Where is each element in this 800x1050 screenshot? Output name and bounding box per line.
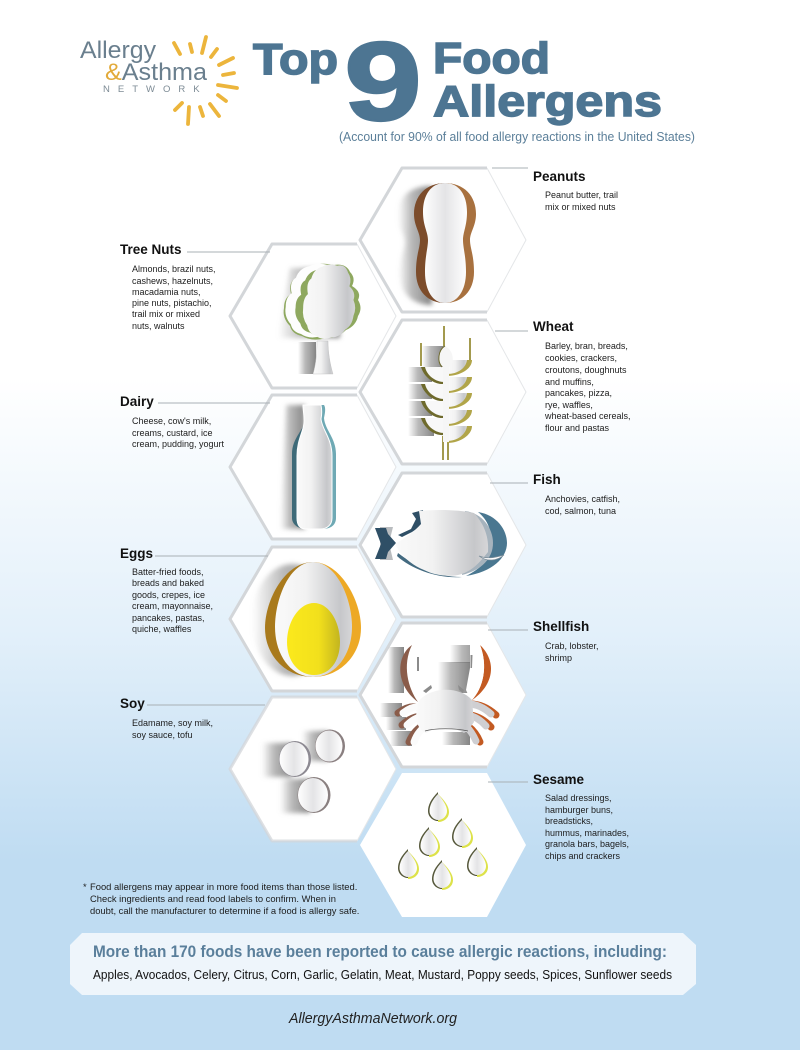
icon: sun rays bbox=[174, 37, 237, 124]
icon: peanut bbox=[398, 183, 476, 305]
label: Sesame: Salad dressings, bbox=[545, 793, 612, 803]
icon: wheat bbox=[408, 326, 472, 460]
egg orange shell edge bbox=[313, 562, 361, 677]
label: Wheat: and muffins, bbox=[545, 377, 594, 387]
label: Dairy bbox=[120, 394, 270, 449]
hexagon: wheat bbox=[360, 320, 526, 464]
label: Sesame: Sesame bbox=[533, 772, 585, 787]
hexagon: soy bbox=[230, 697, 396, 841]
bottle dark teal edge bbox=[292, 420, 315, 529]
crab claw white inner strip bbox=[466, 645, 484, 701]
wheat right grains bbox=[447, 360, 472, 443]
label: Wheat: cookies, crackers, bbox=[545, 353, 617, 363]
egg white bbox=[275, 562, 352, 677]
label: Eggs: goods, crepes, ice bbox=[132, 590, 205, 600]
website url: AllergyAsthmaNetwork.org bbox=[288, 1011, 457, 1027]
label: Soy: Soy bbox=[120, 696, 145, 711]
bean 2 bbox=[315, 730, 345, 762]
label: Dairy: creams, custard, ice bbox=[132, 428, 213, 438]
fish gill slit bbox=[479, 555, 504, 560]
label: Tree Nuts: nuts, walnuts bbox=[132, 321, 185, 331]
label: Wheat: wheat-based cereals, bbox=[544, 411, 631, 421]
logo wordmark: &Asthma bbox=[105, 59, 208, 86]
crab right claw edge bbox=[471, 645, 491, 701]
label: Tree Nuts bbox=[120, 242, 270, 331]
fish blue tail crescent bbox=[466, 512, 507, 576]
crab left claw edge bbox=[400, 645, 418, 702]
label: Shellfish bbox=[488, 619, 599, 663]
label: Dairy: Cheese, cow's milk, bbox=[132, 416, 211, 426]
title: Top 9 Food Allergens: Allergens bbox=[433, 77, 662, 126]
label: Wheat: flour and pastas bbox=[545, 423, 610, 433]
label: Soy bbox=[120, 696, 265, 740]
crab shadows bbox=[380, 645, 480, 746]
hexagon: eggs bbox=[230, 547, 396, 691]
crab notches bbox=[417, 655, 472, 693]
tree trunk bbox=[313, 341, 333, 374]
label: Wheat bbox=[495, 319, 631, 433]
label: Eggs bbox=[120, 546, 268, 634]
footnote: Food allergens may appear in more food items than those listed. bbox=[90, 881, 357, 892]
label: Sesame: chips and crackers bbox=[545, 851, 621, 861]
fish tail bbox=[380, 527, 393, 560]
soybean shadows bbox=[262, 731, 328, 813]
logo wordmark: Allergy bbox=[80, 37, 156, 64]
label: Eggs: breads and baked bbox=[132, 578, 204, 588]
label: Peanuts: Peanuts bbox=[533, 169, 586, 184]
hexagon: dairy bbox=[230, 395, 396, 539]
label: Soy: soy sauce, tofu bbox=[132, 730, 193, 740]
label: Eggs: Eggs bbox=[120, 546, 153, 561]
label: Sesame bbox=[488, 772, 629, 861]
bottle light teal edge bbox=[315, 405, 336, 529]
icon: tree bbox=[278, 264, 360, 374]
egg yolk bbox=[287, 603, 340, 675]
label: Eggs: Batter-fried foods, bbox=[132, 567, 204, 577]
label: Tree Nuts: Almonds, brazil nuts, bbox=[132, 264, 216, 274]
subtitle: (Account for 90% of all food allergy reactions in the United States) bbox=[339, 130, 695, 144]
title: Top 9 Food Allergens bbox=[253, 19, 662, 144]
label: Tree Nuts: pine nuts, pistachio, bbox=[132, 298, 212, 308]
seed 5 bbox=[432, 860, 453, 890]
label: Wheat: pancakes, pizza, bbox=[545, 388, 612, 398]
label: Peanuts bbox=[492, 168, 618, 212]
label: Shellfish: shrimp bbox=[545, 653, 572, 663]
label: Tree Nuts: macadamia nuts, bbox=[132, 287, 201, 297]
hexagon: tree nuts bbox=[230, 244, 396, 388]
label: Tree Nuts: trail mix or mixed bbox=[132, 309, 200, 319]
logo: Allergy & Asthma Network bbox=[80, 37, 237, 124]
hexagon: fish bbox=[360, 473, 526, 617]
logo wordmark bbox=[80, 37, 208, 95]
label: Shellfish: Shellfish bbox=[533, 619, 589, 634]
bottle white body bbox=[297, 405, 332, 529]
hexagon: shellfish bbox=[360, 623, 526, 767]
bean 3 bbox=[298, 777, 330, 813]
tree white layer bbox=[285, 264, 351, 337]
icon: crab bbox=[380, 645, 496, 746]
icon: milk bottle bbox=[280, 405, 336, 529]
wheat left grains bbox=[421, 367, 444, 435]
icon: egg with yolk bbox=[252, 562, 361, 677]
seed 4 bbox=[398, 849, 419, 879]
icon: sesame seeds bbox=[398, 792, 488, 890]
seed 1 bbox=[428, 792, 449, 822]
crab right legs bbox=[466, 704, 491, 741]
label: Wheat: Barley, bran, breads, bbox=[545, 341, 628, 351]
label: Sesame: hummus, marinades, bbox=[545, 828, 629, 838]
hexagon: sesame bbox=[360, 773, 526, 917]
label: Sesame: breadsticks, bbox=[545, 816, 593, 826]
tree outer canopy edge bbox=[284, 264, 360, 340]
crab body bbox=[416, 690, 474, 733]
wheat centre stalk and top grain bbox=[439, 346, 453, 442]
bean 1 bbox=[279, 741, 311, 777]
label: Wheat: rye, waffles, bbox=[545, 400, 593, 410]
label: Dairy: Dairy bbox=[120, 394, 154, 409]
label: Wheat: Wheat bbox=[533, 319, 574, 334]
fish dark back fin bbox=[398, 510, 424, 537]
label: Fish: Anchovies, catfish, bbox=[545, 494, 620, 504]
egg dark shell edge bbox=[265, 562, 313, 677]
title: Top 9 Food Allergens: 9 bbox=[344, 19, 422, 144]
label: Peanuts: mix or mixed nuts bbox=[545, 202, 616, 212]
label: Sesame: granola bars, bagels, bbox=[545, 839, 629, 849]
crab left legs bbox=[403, 707, 429, 742]
seed 6 bbox=[467, 847, 488, 877]
logo wordmark: NETWORK bbox=[103, 84, 208, 95]
label: Wheat: croutons, doughnuts bbox=[545, 365, 627, 375]
callout: more than 170 foods bbox=[70, 933, 696, 995]
footnote: doubt, call the manufacturer to determine if a food is allergy safe. bbox=[90, 905, 359, 916]
label: Tree Nuts: cashews, hazelnuts, bbox=[132, 276, 213, 286]
crab right legs edge bbox=[468, 704, 496, 742]
label: Fish bbox=[490, 472, 620, 516]
footnote: * bbox=[83, 881, 87, 892]
title: Top 9 Food Allergens: Top bbox=[253, 35, 338, 84]
label: Eggs: pancakes, pastas, bbox=[132, 613, 205, 623]
label: Eggs: cream, mayonnaise, bbox=[132, 601, 213, 611]
footnote: Check ingredients and read food labels to confirm. When in bbox=[90, 893, 336, 904]
label: Soy: Edamame, soy milk, bbox=[132, 718, 213, 728]
label: Shellfish: Crab, lobster, bbox=[545, 641, 599, 651]
hexagon: peanuts bbox=[360, 168, 526, 312]
label: Sesame: hamburger buns, bbox=[545, 805, 613, 815]
label: Eggs: quiche, waffles bbox=[132, 624, 192, 634]
tree green inner layer bbox=[295, 268, 357, 336]
wheat stems bbox=[421, 326, 470, 460]
wheat shadows bbox=[408, 346, 444, 436]
title: Top 9 Food Allergens: Food bbox=[433, 34, 550, 83]
tree white canopy bbox=[303, 264, 355, 339]
seed 3 bbox=[419, 827, 440, 857]
label: Fish: Fish bbox=[533, 472, 561, 487]
label: Fish: cod, salmon, tuna bbox=[545, 506, 616, 516]
crab left legs edge bbox=[398, 707, 425, 742]
callout heading: More than 170 foods have been reported to cause allergic reactions, including: bbox=[93, 942, 667, 961]
crab mouth line bbox=[425, 729, 468, 731]
seed 2 bbox=[452, 818, 473, 848]
label: Peanuts: Peanut butter, trail bbox=[545, 190, 618, 200]
fish white body bbox=[395, 510, 488, 576]
icon: soybeans bbox=[262, 730, 345, 813]
label: Dairy: cream, pudding, yogurt bbox=[132, 439, 225, 449]
icon: fish bbox=[375, 510, 507, 577]
label: Tree Nuts: Tree Nuts bbox=[120, 242, 182, 257]
callout list: Apples, Avocados, Celery, Citrus, Corn, Garlic, Gelatin, Meat, Mustard, Poppy seeds, Spices, Sunflower seeds bbox=[93, 968, 672, 982]
